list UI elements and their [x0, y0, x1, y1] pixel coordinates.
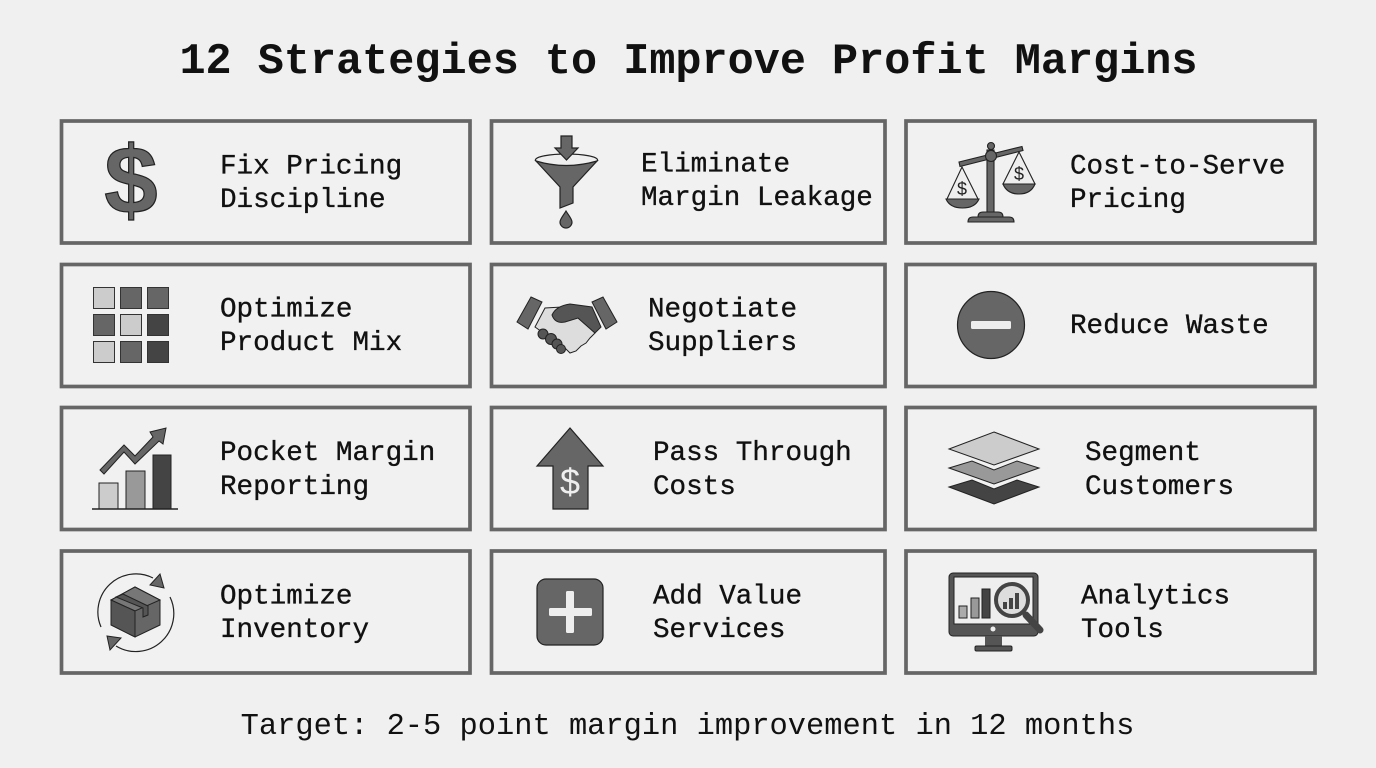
label: add value services: Add Value — [653, 582, 802, 612]
panel: analytics tools — [906, 551, 1315, 673]
panel: optimize inventory — [62, 551, 470, 673]
label: pass through costs: Costs — [653, 472, 736, 503]
icon: product grid — [94, 288, 168, 362]
panel: negotiate suppliers — [492, 264, 885, 386]
label: pocket margin reporting: Pocket Margin — [220, 438, 435, 469]
icon: dollar sign: $ — [104, 127, 158, 234]
panel: cost-to-serve pricing — [906, 121, 1315, 243]
label: optimize product mix: Product Mix — [220, 328, 402, 359]
label: segment customers: Customers — [1085, 472, 1234, 503]
title: 12 Strategies to Improve Profit Margins — [179, 38, 1198, 87]
label: negotiate suppliers: Negotiate — [648, 294, 797, 326]
icon: plus square — [537, 579, 603, 645]
label: pass through costs: Pass Through — [653, 438, 852, 469]
label: cost-to-serve pricing: Pricing — [1070, 185, 1186, 216]
label: pocket margin reporting: Reporting — [220, 472, 369, 503]
label: cost-to-serve pricing: Cost-to-Serve — [1070, 152, 1285, 182]
icon: balance scale: $ — [957, 179, 967, 199]
panel: fix pricing discipline — [62, 121, 470, 243]
footer target statement: Target: 2-5 point margin improvement in 12 months — [241, 710, 1134, 744]
icon: up arrow with dollar — [537, 428, 603, 509]
label: eliminate margin leakage: Margin Leakage — [641, 183, 873, 214]
panel: add value services — [492, 551, 885, 673]
icon: up arrow with dollar: $ — [560, 461, 580, 502]
label: negotiate suppliers: Suppliers — [648, 328, 797, 359]
label: add value services: Services — [653, 615, 785, 646]
panel: eliminate margin leakage — [492, 121, 885, 243]
panel: pass through costs — [492, 408, 885, 530]
icon: rising bar chart — [92, 428, 178, 509]
icon: stacked layers — [949, 432, 1039, 504]
panel: pocket margin reporting — [62, 408, 470, 530]
label: analytics tools: Analytics — [1081, 582, 1230, 612]
label: analytics tools: Tools — [1081, 615, 1164, 646]
icon: balance scale: $ — [1014, 164, 1024, 184]
label: fix pricing discipline: Fix Pricing — [220, 152, 402, 182]
label: fix pricing discipline: Discipline — [220, 185, 386, 216]
icon: monitor with magnifier — [949, 573, 1040, 651]
icon: minus circle — [958, 292, 1024, 358]
label: eliminate margin leakage: Eliminate — [641, 150, 790, 180]
icon: handshake — [517, 297, 617, 354]
icon: balance scale — [946, 142, 1035, 222]
label: optimize inventory: Inventory — [220, 615, 369, 646]
icon: box with cycle arrows — [98, 574, 174, 652]
panel: reduce waste — [906, 264, 1315, 386]
panel: segment customers — [906, 408, 1315, 530]
icon: funnel with arrow and drop — [536, 136, 598, 228]
panel: optimize product mix — [62, 264, 470, 386]
label: optimize product mix: Optimize — [220, 294, 352, 326]
label: reduce waste: Reduce Waste — [1070, 311, 1269, 342]
label: optimize inventory: Optimize — [220, 582, 352, 612]
label: segment customers: Segment — [1085, 438, 1201, 469]
